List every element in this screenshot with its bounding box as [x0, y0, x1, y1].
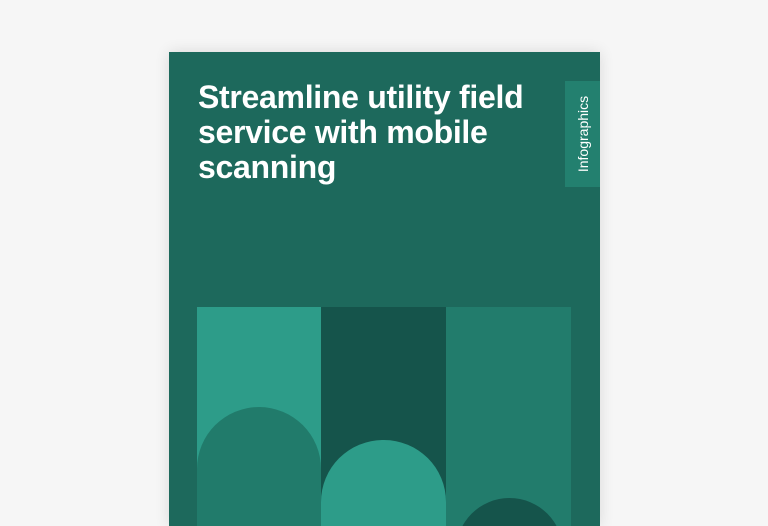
- tab: Infographics: Infographics: [574, 96, 590, 172]
- tab: Infographics: [565, 81, 600, 187]
- title: Streamline utility field service with mobile scanning: [198, 79, 523, 185]
- card: [169, 52, 600, 526]
- column 3: [446, 307, 571, 526]
- column 2: [321, 307, 446, 526]
- column 1: [197, 307, 321, 526]
